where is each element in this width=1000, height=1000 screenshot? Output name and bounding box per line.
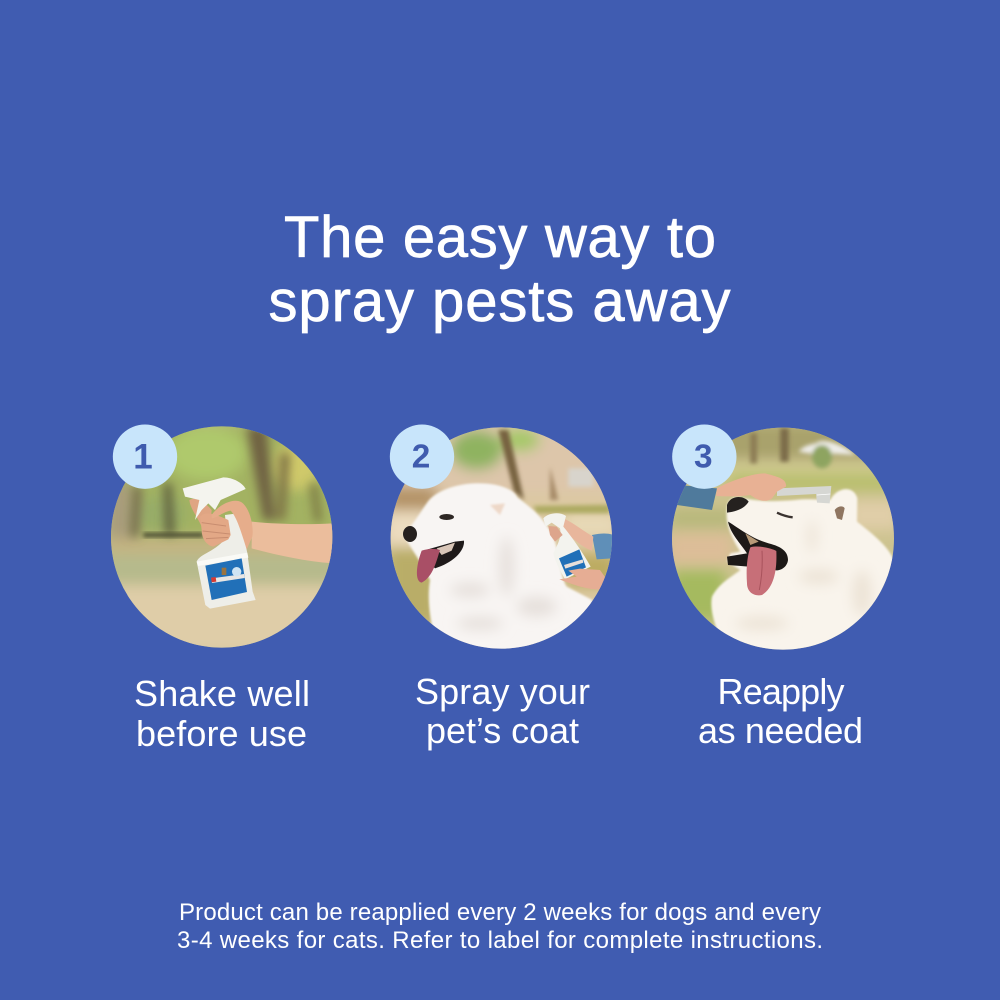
footnote: Product can be reapplied every 2 weeks for dogs and every	[179, 899, 821, 926]
arm and sleeve	[677, 473, 786, 510]
nose	[403, 526, 417, 542]
step 3 caption: Reapply	[718, 671, 844, 712]
title: spray pests away	[268, 269, 730, 334]
number badge 1	[113, 424, 177, 489]
closed eye	[777, 513, 793, 517]
dog	[711, 489, 895, 653]
footnote	[177, 899, 823, 954]
number badge 1: 1	[133, 437, 153, 476]
mouth	[423, 541, 464, 568]
hands with bottle and sleeve	[543, 513, 613, 589]
comb	[777, 486, 831, 503]
step 3 caption	[698, 671, 863, 751]
number badge 3	[672, 424, 736, 489]
step 3: photo of dog being combed	[669, 423, 902, 653]
tongue	[747, 547, 776, 595]
nose	[727, 497, 749, 513]
title: The easy way to	[284, 205, 716, 270]
step 3 caption: as needed	[698, 710, 863, 751]
footnote: 3-4 weeks for cats. Refer to label for complete instructions.	[177, 927, 823, 954]
step 1 caption	[134, 673, 310, 754]
dog body	[403, 483, 593, 653]
title	[268, 205, 730, 334]
photo background: park	[387, 423, 620, 653]
arm and back of hand	[189, 499, 333, 563]
step 2: photo of dog being sprayed	[387, 423, 620, 653]
spray bottle	[183, 477, 256, 609]
step 2 caption: pet’s coat	[426, 710, 579, 751]
step 1: photo of hand holding spray bottle	[107, 423, 340, 655]
eye	[439, 514, 454, 520]
open mouth	[727, 522, 788, 570]
number badge 3: 3	[694, 439, 713, 476]
number badge 2: 2	[412, 439, 430, 476]
photo background: park	[669, 423, 902, 653]
tongue	[417, 549, 440, 583]
ear inner	[835, 506, 845, 520]
step 2 caption	[415, 671, 590, 751]
number badge 2	[390, 424, 454, 489]
photo background: park	[107, 423, 340, 655]
step 1 caption: Shake well	[134, 673, 310, 714]
bottle label	[205, 558, 247, 600]
step 1 caption: before use	[136, 713, 307, 754]
step 2 caption: Spray your	[415, 671, 590, 712]
fist and thumb over bottle	[200, 501, 253, 549]
